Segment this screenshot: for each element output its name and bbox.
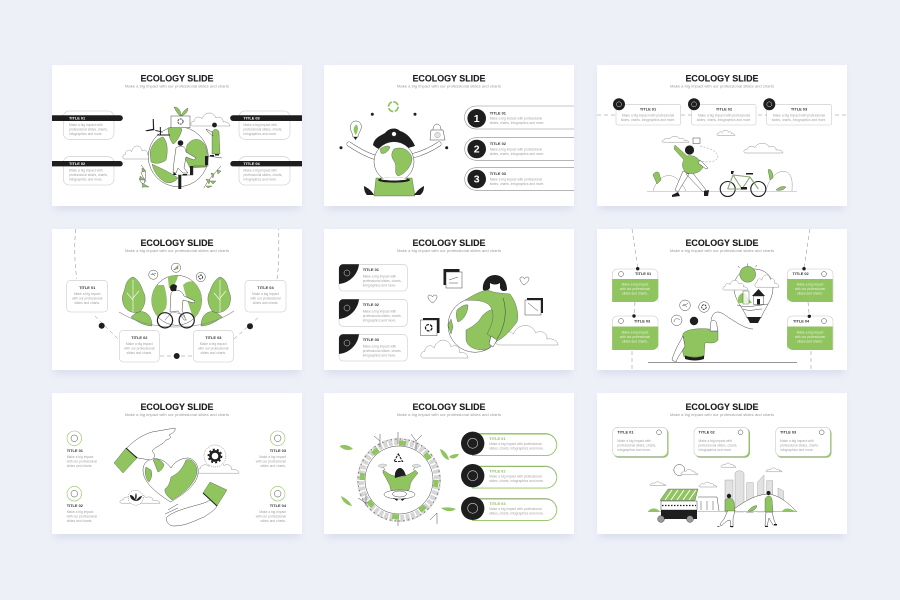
card 3: with our professional xyxy=(198,346,229,350)
card: title 04 xyxy=(230,157,302,185)
card 1: Make a big impact with professional xyxy=(622,113,674,117)
card 1: with our professional xyxy=(72,296,103,300)
card 4: slides and charts. xyxy=(797,340,823,344)
card 1: professional slides, charts, xyxy=(617,444,656,448)
icon: gear xyxy=(204,445,226,467)
card: title 03: TITLE 03 xyxy=(244,116,261,121)
card: title 02: professional slides, charts, xyxy=(69,173,108,177)
item 01: Make a big impact xyxy=(67,455,94,459)
item 02: TITLE 02 xyxy=(67,503,84,508)
pill 1: 1 xyxy=(474,113,480,125)
card 3: infographics and more. xyxy=(363,354,396,358)
card: title 04: infographics and more. xyxy=(244,178,277,182)
card 3: slides, charts, infographics and more. xyxy=(772,118,826,122)
subtitle: Make a big impact with our professional slides and charts xyxy=(397,249,501,253)
card 2: infographics and more. xyxy=(698,448,732,452)
card 2: professional slides, charts, xyxy=(698,444,737,448)
pill 2 xyxy=(465,138,574,160)
card 3: Make a big impact with xyxy=(363,344,396,348)
pill 2: Make a big impact with professional xyxy=(489,474,542,478)
card 1: TITLE 01 xyxy=(635,271,652,276)
pill 1: slides, charts, infographics and more. xyxy=(490,121,544,125)
icon: recycle xyxy=(388,102,398,111)
card 1 xyxy=(67,280,108,312)
pill 2 xyxy=(461,464,557,488)
icon card: leaf xyxy=(525,298,543,315)
title: ECOLOGY SLIDE xyxy=(412,237,486,248)
pill 2: 2 xyxy=(474,144,480,156)
pill 1 xyxy=(464,106,574,129)
item 04: TITLE 04 xyxy=(270,503,287,508)
card 2: with our professional xyxy=(124,346,155,350)
card 2: slides and charts. xyxy=(797,292,823,296)
item 03: with our professional xyxy=(256,460,286,464)
card 1: infographics and more. xyxy=(363,284,396,288)
illustration: globe with stairs and people xyxy=(123,107,230,189)
card: title 04: TITLE 04 xyxy=(244,161,261,166)
pill 3: slides, charts, infographics and more. xyxy=(490,182,544,186)
illustration: person walking and bicycle xyxy=(647,130,797,197)
slide 6: green cards and light bulb xyxy=(597,229,847,374)
card 4: Make a big impact xyxy=(252,292,279,296)
pill 1: Make a big impact with professional xyxy=(490,117,542,121)
illustration: market cart and city xyxy=(648,463,797,527)
slide 7: hands and heart globe xyxy=(52,393,302,538)
pill 2: Make a big impact with professional xyxy=(490,148,542,152)
item 02 xyxy=(67,486,97,523)
item 01: TITLE 01 xyxy=(67,448,84,453)
subtitle: Make a big impact with our professional slides and charts xyxy=(125,413,229,417)
slide 9: three cards and market street xyxy=(597,393,847,538)
card 2: TITLE 02 xyxy=(716,106,733,111)
pill 1: Make a big impact with professional xyxy=(489,442,542,446)
card 1 xyxy=(612,267,658,302)
card: title 03: Make a big impact with xyxy=(244,123,277,127)
icon: leaves xyxy=(128,490,143,505)
card 2: TITLE 02 xyxy=(131,335,148,340)
pill 3 xyxy=(461,497,557,521)
card 3: Make a big impact with professional xyxy=(773,113,825,117)
card 2: Make a big impact xyxy=(126,342,153,346)
title: ECOLOGY SLIDE xyxy=(140,401,214,412)
card 3 xyxy=(193,330,233,362)
item 04: Make a big impact xyxy=(259,510,286,514)
pill 1 xyxy=(461,432,557,456)
card 1 xyxy=(613,98,681,125)
item 03: Make a big impact xyxy=(259,455,286,459)
pill 3: Make a big impact with professional xyxy=(489,507,542,511)
card 2: TITLE 02 xyxy=(792,271,810,276)
card 1: Make a big impact xyxy=(622,282,648,286)
pill 2: TITLE 02 xyxy=(489,468,506,474)
card 3 xyxy=(612,314,658,350)
slide 4: arc of cards with cyclist xyxy=(52,229,302,374)
illustration: hands holding heart globe xyxy=(114,428,239,526)
card 4: Make a big impact xyxy=(797,330,823,334)
pill 3: 3 xyxy=(474,174,480,186)
title: ECOLOGY SLIDE xyxy=(686,237,758,248)
card: title 03: infographics and more. xyxy=(244,132,277,136)
card 3: with our professional xyxy=(620,335,650,339)
card 1: slides and charts. xyxy=(622,292,648,296)
item 03: TITLE 03 xyxy=(270,448,287,453)
card: title 03 xyxy=(230,111,302,139)
card 1: professional slides, charts, xyxy=(363,279,402,283)
subtitle: Make a big impact with our professional slides and charts xyxy=(397,85,501,89)
card 3: Make a big impact xyxy=(200,342,227,346)
card 2: Make a big impact xyxy=(797,282,823,286)
pill 2: slides, charts, infographics and more. xyxy=(490,152,544,156)
card 3: TITLE 03 xyxy=(205,335,222,340)
item 02: slides and charts. xyxy=(67,519,92,523)
pill 3 xyxy=(465,168,574,190)
title: ECOLOGY SLIDE xyxy=(412,73,486,84)
slide 5: icon cards and person hugging globe xyxy=(324,229,574,374)
card 2: slides, charts, infographics and more. xyxy=(697,118,751,122)
card 1: TITLE 01 xyxy=(363,267,380,272)
illustration: person with bulb xyxy=(648,264,797,362)
card 4: with our professional xyxy=(795,335,825,339)
card 1: TITLE 01 xyxy=(640,106,657,111)
slide 8: meditating person and pills xyxy=(324,393,574,538)
card: title 01: professional slides, charts, xyxy=(69,128,108,132)
subtitle: Make a big impact with our professional slides and charts xyxy=(125,249,229,253)
card 2: Make a big impact with xyxy=(698,439,732,443)
illustration: meditating person in city ring xyxy=(340,432,459,526)
pill 3: Make a big impact with professional xyxy=(490,178,542,182)
slide 3: dashed timeline and walker with bicycle xyxy=(597,65,847,210)
item 03: slides and charts. xyxy=(260,464,286,468)
card 2 xyxy=(688,98,756,125)
card 2: Make a big impact with xyxy=(363,310,396,314)
pill 1: slides, charts, infographics and more. xyxy=(489,446,544,450)
subtitle: Make a big impact with our professional slides and charts xyxy=(397,413,501,417)
card 2: professional slides, charts, xyxy=(363,314,402,318)
title: ECOLOGY SLIDE xyxy=(412,401,486,412)
card 4: with our professional xyxy=(250,296,281,300)
card 4: TITLE 04 xyxy=(257,285,274,290)
illustration: person holding globe xyxy=(340,102,448,196)
item 04 xyxy=(256,486,287,523)
title: ECOLOGY SLIDE xyxy=(140,73,214,84)
card 4: TITLE 04 xyxy=(793,318,810,324)
card 1: Make a big impact with xyxy=(363,274,396,278)
card 3: TITLE 03 xyxy=(363,337,380,342)
slide 2: numbered pills and globe person xyxy=(324,65,574,210)
subtitle: Make a big impact with our professional slides and charts xyxy=(125,85,229,89)
card: title 01: Make a big impact with xyxy=(69,123,103,127)
subtitle: Make a big impact with our professional slides and charts xyxy=(670,249,774,253)
card: title 01 xyxy=(52,111,123,139)
card 1: slides and charts. xyxy=(74,301,100,305)
pill 3: slides, charts, infographics and more. xyxy=(489,512,544,516)
item 02: Make a big impact xyxy=(67,510,94,514)
card: title 02: infographics and more. xyxy=(69,178,103,182)
card 1: TITLE 01 xyxy=(79,285,96,290)
card 2: slides and charts. xyxy=(126,351,152,355)
card 1: infographics and more. xyxy=(617,448,651,452)
card: title 02: Make a big impact with xyxy=(69,168,103,172)
card 1 xyxy=(339,264,407,291)
slide 1: title bars and globe stairs xyxy=(52,65,302,210)
pill 3: TITLE 03 xyxy=(490,171,507,176)
card 3: Make a big impact xyxy=(622,330,648,334)
item 04: slides and charts. xyxy=(260,519,286,523)
card: title 01: infographics and more. xyxy=(69,132,103,136)
card 2: Make a big impact with professional xyxy=(698,113,750,117)
card 2: TITLE 02 xyxy=(363,302,380,307)
title: ECOLOGY SLIDE xyxy=(140,237,214,248)
dots xyxy=(99,323,253,359)
pill 2: slides, charts, infographics and more. xyxy=(489,479,544,483)
card 2 xyxy=(339,299,407,326)
card: title 04: professional slides, charts, xyxy=(244,173,282,177)
illustration: person hugging globe xyxy=(420,269,558,358)
icon: hearts xyxy=(428,277,529,303)
card: title 02 xyxy=(52,157,123,185)
pill 2: TITLE 02 xyxy=(490,141,507,146)
card 3: Make a big impact with xyxy=(780,439,814,443)
card 2: with our professional xyxy=(795,287,825,291)
card: title 01: TITLE 01 xyxy=(69,116,86,121)
card: title 03: professional slides, charts, xyxy=(244,128,282,132)
card 2: infographics and more. xyxy=(363,318,396,322)
icon card: recycle xyxy=(420,318,440,336)
card: title 04: Make a big impact with xyxy=(244,168,277,172)
card 3: slides and charts. xyxy=(622,340,648,344)
icon card: hands xyxy=(444,269,462,288)
card 3: slides and charts. xyxy=(200,351,226,355)
title: ECOLOGY SLIDE xyxy=(686,73,758,84)
card 3: TITLE 03 xyxy=(780,430,797,434)
card 3: professional slides, charts, xyxy=(780,444,819,448)
card 3: TITLE 03 xyxy=(634,318,651,324)
item 04: with our professional xyxy=(256,514,286,518)
card 1: with our professional xyxy=(620,287,650,291)
title: ECOLOGY SLIDE xyxy=(686,401,758,412)
card 2 xyxy=(119,330,159,362)
subtitle: Make a big impact with our professional slides and charts xyxy=(670,413,774,417)
icon: bulb xyxy=(350,121,361,140)
card 3 xyxy=(339,334,407,361)
card: title 02: TITLE 02 xyxy=(69,161,86,166)
item 01: with our professional xyxy=(67,460,97,464)
card 1: slides, charts, infographics and more. xyxy=(621,118,675,122)
icon: bag xyxy=(430,124,445,140)
card 3 xyxy=(763,98,832,125)
pill 3: TITLE 03 xyxy=(489,501,506,506)
card 2: TITLE 02 xyxy=(698,430,716,434)
card 2 xyxy=(787,267,833,302)
card 1 xyxy=(613,427,668,458)
item 01 xyxy=(67,431,97,468)
item 01: slides and charts. xyxy=(67,464,92,468)
illustration: cyclist, trees and globe xyxy=(119,263,234,328)
item 03 xyxy=(256,431,287,468)
card 3 xyxy=(776,427,832,458)
card 1: Make a big impact xyxy=(74,292,101,296)
subtitle: Make a big impact with our professional slides and charts xyxy=(670,85,774,89)
item 02: with our professional xyxy=(67,514,97,518)
pill 1: TITLE 01 xyxy=(489,436,506,441)
pill 1: TITLE 01 xyxy=(490,110,507,115)
card 1: TITLE 01 xyxy=(617,430,634,434)
card 3: infographics and more. xyxy=(780,448,814,452)
card 4 xyxy=(245,280,286,312)
card 4 xyxy=(787,315,833,350)
card 4: slides and charts. xyxy=(253,301,278,305)
card 3: TITLE 03 xyxy=(791,106,808,111)
card 1: Make a big impact with xyxy=(617,439,651,443)
card 3: professional slides, charts, xyxy=(363,349,402,353)
card 2 xyxy=(694,427,750,458)
